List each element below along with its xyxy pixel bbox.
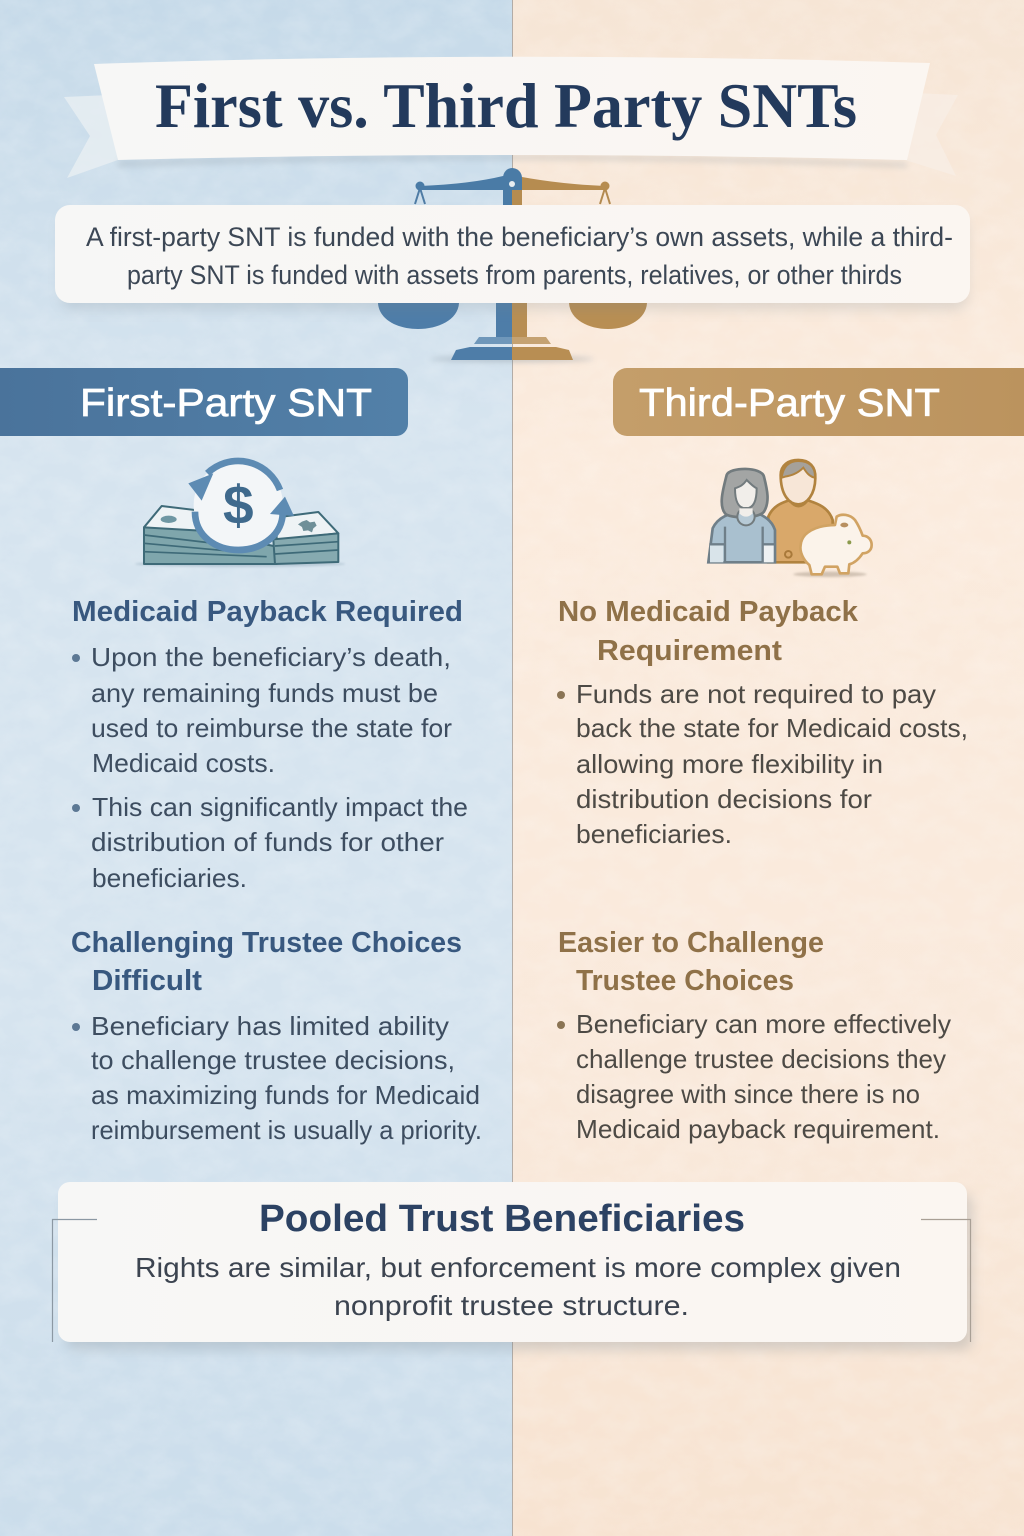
bullet list: payback: beneficiaries. bbox=[92, 863, 247, 893]
bullet list: payback: distribution of funds for other bbox=[91, 827, 444, 857]
bullet list: trustee choices: reimbursement is usually a priority. bbox=[91, 1115, 482, 1145]
heading: No Medicaid Payback Requirement: Requirement bbox=[597, 635, 782, 667]
bullet list: no payback: back the state for Medicaid costs, bbox=[576, 713, 968, 743]
bullet list: trustee choices: as maximizing funds for Medicaid bbox=[91, 1080, 480, 1110]
icon: money stack with circular dollar arrows: $ bbox=[223, 474, 254, 536]
bullet list: no payback bbox=[557, 679, 968, 849]
heading: Easier to Challenge Trustee Choices: Trustee Choices bbox=[576, 965, 794, 997]
bullet list: trustee choices: to challenge trustee decisions, bbox=[91, 1045, 455, 1075]
panel: left background bbox=[0, 0, 512, 1536]
intro line 1: A first-party SNT is funded with the beneficiary’s own assets, while a third- bbox=[86, 222, 953, 252]
callout body line 1: Rights are similar, but enforcement is more complex given bbox=[135, 1252, 901, 1283]
heading: Medicaid Payback Required: Medicaid Payback Required bbox=[72, 596, 463, 628]
heading: Third-Party SNT bbox=[613, 368, 1024, 436]
intro line 2: party SNT is funded with assets from parents, relatives, or other thirds bbox=[127, 260, 902, 290]
heading: Easier to Challenge Trustee Choices bbox=[558, 927, 824, 997]
panel: right background bbox=[512, 0, 1024, 1536]
bullet list: no payback: distribution decisions for bbox=[576, 784, 872, 814]
bullet list: easier challenge: Medicaid payback requirement. bbox=[576, 1114, 940, 1144]
callout heading: Pooled Trust Beneficiaries bbox=[259, 1198, 745, 1240]
bullet list: payback: This can significantly impact the bbox=[92, 792, 468, 822]
bullet list: no payback: allowing more flexibility in bbox=[576, 749, 883, 779]
heading: First-Party SNT: First-Party SNT bbox=[80, 382, 372, 425]
panel: first-party details bbox=[71, 596, 482, 1145]
bullet list: no payback: Funds are not required to pay bbox=[576, 679, 936, 709]
bullet list: easier challenge: challenge trustee decisions they bbox=[576, 1044, 946, 1074]
bullet list: payback: any remaining funds must be bbox=[91, 678, 438, 708]
heading: First-Party SNT bbox=[0, 368, 408, 436]
bullet list: easier challenge: disagree with since there is no bbox=[576, 1079, 920, 1109]
icon: balance scale bbox=[378, 168, 647, 362]
bullet list: payback bbox=[72, 642, 468, 893]
bullet list: no payback: beneficiaries. bbox=[576, 819, 732, 849]
heading: No Medicaid Payback Requirement: No Medicaid Payback bbox=[558, 596, 859, 628]
bullet list: trustee choices: Beneficiary has limited ability bbox=[91, 1011, 449, 1041]
bullet list: payback: Medicaid costs. bbox=[92, 748, 275, 778]
bullet list: payback: Upon the beneficiary’s death, bbox=[91, 642, 451, 672]
bullet list: easier challenge bbox=[557, 1009, 951, 1144]
panel: third-party details bbox=[557, 596, 968, 1144]
heading: Challenging Trustee Choices Difficult: Challenging Trustee Choices bbox=[71, 927, 462, 959]
intro text box bbox=[55, 205, 970, 310]
bullet list: payback: used to reimburse the state for bbox=[91, 713, 452, 743]
heading: Third-Party SNT: Third-Party SNT bbox=[639, 382, 940, 425]
callout body line 2: nonprofit trustee structure. bbox=[334, 1290, 689, 1321]
title banner bbox=[64, 57, 958, 178]
heading: Easier to Challenge Trustee Choices: Easier to Challenge bbox=[558, 927, 824, 959]
heading: Challenging Trustee Choices Difficult bbox=[71, 927, 462, 997]
icon: couple with piggy bank bbox=[708, 460, 872, 577]
icon: money stack with circular dollar arrows bbox=[135, 460, 345, 567]
callout: Pooled Trust Beneficiaries bbox=[52, 1182, 972, 1350]
heading: No Medicaid Payback Requirement bbox=[558, 596, 859, 667]
bullet list: easier challenge: Beneficiary can more effectively bbox=[576, 1009, 951, 1039]
bullet list: trustee choices bbox=[72, 1011, 482, 1145]
heading: Challenging Trustee Choices Difficult: Difficult bbox=[92, 965, 202, 997]
title text: First vs. Third Party SNTs bbox=[155, 70, 857, 141]
